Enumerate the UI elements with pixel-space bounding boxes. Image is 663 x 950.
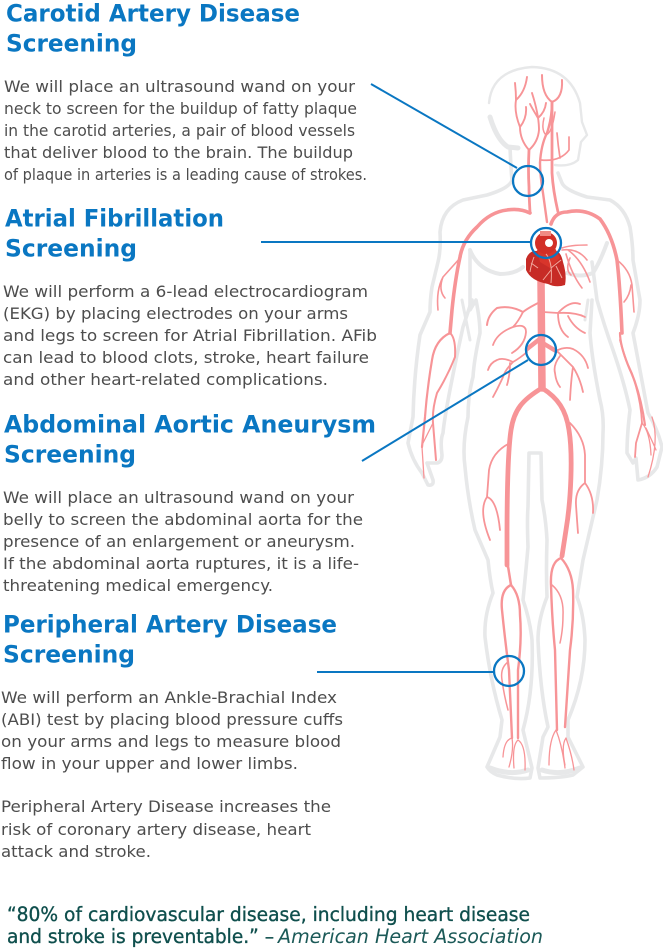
text: peripheral artery disease description: flow in your upper and lower limbs. xyxy=(1,754,298,773)
text: atrial fibrillation description xyxy=(3,282,377,389)
carotid and head arteries xyxy=(515,75,569,222)
text: peripheral artery disease description xyxy=(1,688,343,861)
text: carotid description: that deliver blood to the brain. The buildup xyxy=(4,143,353,162)
text: peripheral artery disease description: (ABI) test by placing blood pressure cuffs xyxy=(1,710,343,729)
text: abdominal aortic aneurysm description: presence of an enlargement or aneurysm. xyxy=(3,532,355,551)
right leg arteries xyxy=(549,423,593,770)
heart branches xyxy=(562,245,590,288)
text: peripheral artery disease description: We will perform an Ankle-Brachial Index xyxy=(1,688,337,707)
heading: carotid xyxy=(6,0,300,58)
heading: carotid: Carotid Artery Disease xyxy=(6,0,300,28)
quote: and stroke is preventable.” – xyxy=(7,925,274,948)
icon: heart xyxy=(526,231,566,286)
heading: peripheral artery disease: Screening xyxy=(3,640,135,668)
text: atrial fibrillation description: (EKG) by placing electrodes on your arms xyxy=(3,304,348,323)
text: abdominal aortic aneurysm description: If the abdominal aorta ruptures, it is a life- xyxy=(3,554,359,573)
quote xyxy=(7,903,543,948)
text: atrial fibrillation description: can lead to blood clots, stroke, heart failure xyxy=(3,348,369,367)
callout leader lines xyxy=(261,84,531,672)
body figure outline xyxy=(408,67,662,779)
abdominal branches xyxy=(487,302,588,400)
text: atrial fibrillation description: and other heart-related complications. xyxy=(3,370,328,389)
heading: atrial fibrillation xyxy=(5,204,224,262)
text: carotid description: neck to screen for the buildup of fatty plaque xyxy=(4,99,357,118)
text: peripheral artery disease description: risk of coronary artery disease, heart xyxy=(1,820,311,839)
quote: “80% of cardiovascular disease, including heart disease xyxy=(7,903,530,926)
left leg arteries xyxy=(483,443,525,770)
aorta and iliac arteries xyxy=(507,280,571,565)
callout circles xyxy=(494,166,561,686)
text: peripheral artery disease description: Peripheral Artery Disease increases the xyxy=(1,797,331,816)
heading: abdominal aortic aneurysm xyxy=(4,410,376,468)
heading: abdominal aortic aneurysm: Abdominal Aortic Aneurysm xyxy=(4,410,376,438)
text: carotid description xyxy=(4,77,367,184)
text: carotid description: in the carotid arteries, a pair of blood vessels xyxy=(4,121,355,140)
heading: abdominal aortic aneurysm: Screening xyxy=(4,440,136,468)
text: atrial fibrillation description: and legs to screen for Atrial Fibrillation. AFib xyxy=(3,326,377,345)
text: abdominal aortic aneurysm description: We will place an ultrasound wand on your xyxy=(3,488,354,507)
heading: atrial fibrillation: Atrial Fibrillation xyxy=(5,204,224,232)
text: carotid description: We will place an ultrasound wand on your xyxy=(4,77,355,96)
text: abdominal aortic aneurysm description: belly to screen the abdominal aorta for the xyxy=(3,510,363,529)
text: peripheral artery disease description: attack and stroke. xyxy=(1,842,151,861)
left arm arteries xyxy=(422,209,530,478)
heading: peripheral artery disease: Peripheral Artery Disease xyxy=(3,610,337,638)
right arm arteries xyxy=(551,211,656,477)
heading: atrial fibrillation: Screening xyxy=(5,234,137,262)
text: peripheral artery disease description: on your arms and legs to measure blood xyxy=(1,732,341,751)
arteries xyxy=(422,75,656,770)
text: abdominal aortic aneurysm description: threatening medical emergency. xyxy=(3,576,273,595)
quote: American Heart Association xyxy=(276,925,543,948)
text: abdominal aortic aneurysm description xyxy=(3,488,363,595)
text: atrial fibrillation description: We will perform a 6-lead electrocardiogram xyxy=(3,282,368,301)
heading: carotid: Screening xyxy=(6,30,137,58)
heading: peripheral artery disease xyxy=(3,610,337,668)
text: carotid description: of plaque in arteries is a leading cause of strokes. xyxy=(4,165,367,184)
